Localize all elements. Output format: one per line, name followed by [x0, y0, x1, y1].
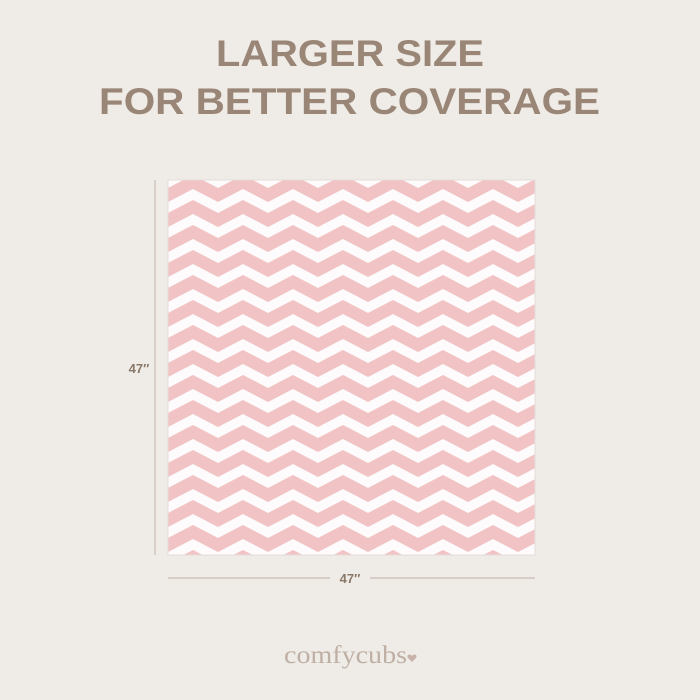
vertical dimension: 47″ [129, 361, 149, 376]
title: FOR BETTER COVERAGE [99, 81, 600, 122]
logo: comfycubs [284, 642, 407, 669]
horizontal dimension: 47″ [340, 571, 360, 586]
blanket image [168, 180, 535, 555]
title: LARGER SIZE [216, 33, 484, 74]
title [99, 33, 600, 122]
